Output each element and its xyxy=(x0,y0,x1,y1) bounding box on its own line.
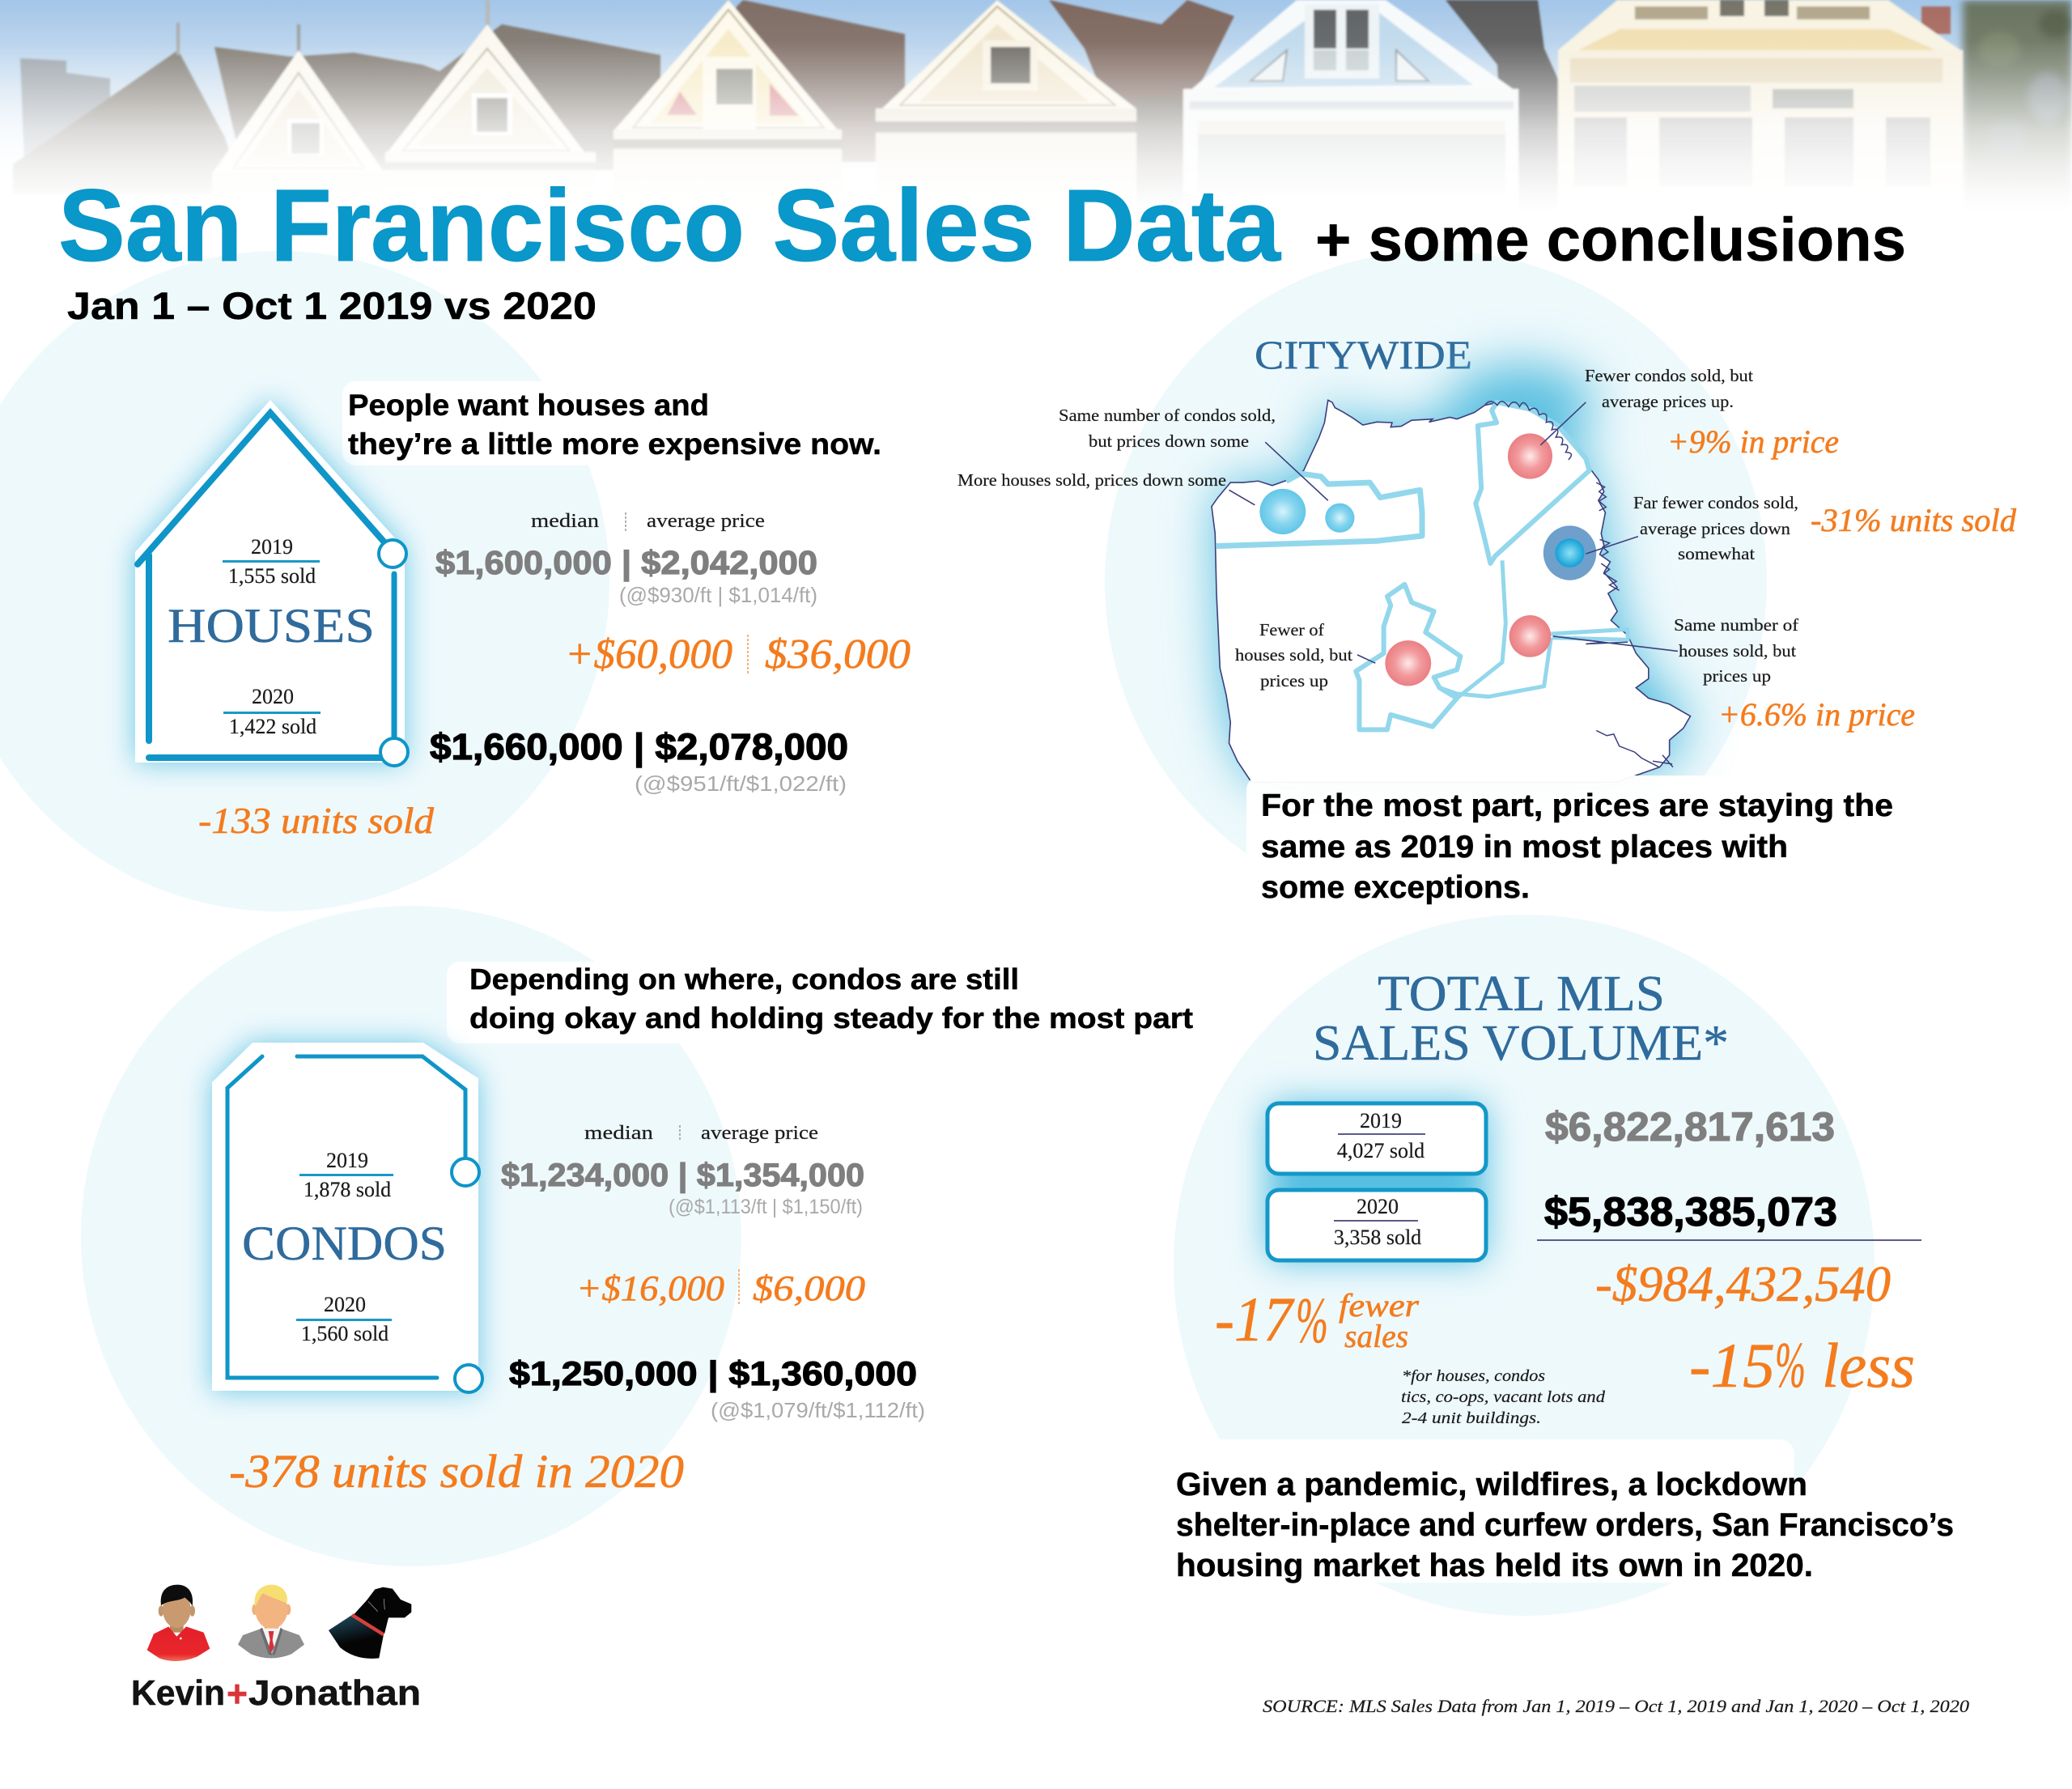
map annotation: downtown condos: Far fewer condos sold, xyxy=(1633,493,1798,512)
houses callout text xyxy=(342,381,909,465)
footnote xyxy=(1401,1367,1606,1427)
icon: house card: 2020 xyxy=(252,685,294,708)
map annotation: houses northwest: More houses sold, prices down some xyxy=(957,470,1226,490)
map annotation: downtown condos xyxy=(1633,493,1798,563)
neighborhood outline: northeast xyxy=(1475,402,1590,563)
house prices 2019: $1,600,000 | $2,042,000 xyxy=(435,544,817,581)
map annotation: southeast houses xyxy=(1674,615,1798,686)
footnote: tics, co-ops, vacant lots and xyxy=(1401,1388,1606,1406)
panel: total MLS sales volume xyxy=(1157,967,1967,1583)
volume 2019: $6,822,817,613 xyxy=(1545,1104,1835,1149)
citywide conclusion text: some exceptions. xyxy=(1261,870,1530,905)
stat: +9% in price: +9% in price xyxy=(1667,423,1839,460)
neighborhood outline: southwest centre xyxy=(1356,584,1460,729)
map annotation: central houses: prices up xyxy=(1260,671,1328,691)
stat: +6.6% in price: +6.6% in price xyxy=(1718,696,1915,733)
icon: Kevin avatar xyxy=(147,1585,210,1661)
total MLS heading xyxy=(1313,967,1729,1071)
map annotation: northeast: average prices up. xyxy=(1602,392,1734,411)
card: 2020 units xyxy=(1267,1190,1486,1260)
map annotation: downtown condos: somewhat xyxy=(1678,544,1755,563)
house price change: +$60,000 xyxy=(565,631,732,678)
subtitle: some conclusions: + some conclusions xyxy=(1315,206,1906,274)
condo price column labels: median xyxy=(584,1123,653,1144)
icon: house card: 1,555 sold xyxy=(228,564,316,588)
map annotation: northeast xyxy=(1585,366,1753,411)
condos callout text: Depending on where, condos are still xyxy=(469,962,1019,996)
overall conclusion text: shelter-in-place and curfew orders, San Francisco’s xyxy=(1176,1507,1954,1543)
logo wordmark: Jonathan xyxy=(248,1673,421,1713)
background circle: total MLS xyxy=(1174,915,1875,1616)
icon: house card: 1,422 sold xyxy=(229,715,316,738)
stat: -17% fewer sales xyxy=(1215,1284,1419,1357)
stat: -15% less: -15 xyxy=(1689,1330,1775,1400)
icon: condo card: 2020 xyxy=(324,1293,366,1316)
background circle: houses xyxy=(0,251,609,911)
house prices 2020: $1,660,000 | $2,078,000 xyxy=(430,726,848,768)
icon: house card: 2019 xyxy=(251,535,293,559)
card: 2019 units: 4,027 sold xyxy=(1337,1139,1424,1162)
citywide conclusion text: same as 2019 in most places with xyxy=(1261,830,1788,865)
map annotation: southeast houses: houses sold, but xyxy=(1679,641,1796,661)
condo price column labels xyxy=(584,1123,818,1144)
icon: dog avatar xyxy=(329,1587,411,1659)
house units sold change: -133 units sold xyxy=(198,800,435,841)
stat: -15% less: less xyxy=(1822,1330,1915,1400)
house price per foot 2020: (@$951/ft/$1,022/ft) xyxy=(635,771,847,796)
houses callout text: People want houses and xyxy=(348,389,709,422)
map annotation: central houses: Fewer of xyxy=(1259,620,1324,640)
map annotation: condos northwest xyxy=(1059,406,1276,451)
stat: -17% fewer sales: sales xyxy=(1344,1318,1408,1354)
map annotation: central houses: houses sold, but xyxy=(1235,645,1352,665)
card: 2020 units: 2020 xyxy=(1357,1195,1399,1218)
map annotation: central houses xyxy=(1235,620,1352,691)
title: San Francisco Sales Data xyxy=(58,168,1281,283)
map annotation: northeast: Fewer condos sold, but xyxy=(1585,366,1753,385)
citywide conclusion text: For the most part, prices are staying the xyxy=(1261,788,1893,823)
map annotation: condos northwest: but prices down some xyxy=(1089,431,1249,451)
volume difference: -$984,432,540 xyxy=(1595,1257,1891,1312)
citywide heading: CITYWIDE xyxy=(1255,332,1472,377)
condos callout text xyxy=(447,962,1216,1043)
coastline detail xyxy=(1484,402,1628,644)
map annotation: southeast houses: prices up xyxy=(1703,666,1771,686)
condo price change: $6,000 xyxy=(753,1268,865,1308)
date range: Jan 1 – Oct 1 2019 vs 2020 xyxy=(67,284,597,327)
gables xyxy=(212,50,385,174)
condos callout text: doing okay and holding steady for the most part xyxy=(469,1001,1193,1035)
icon: condo card xyxy=(212,1043,482,1392)
total MLS heading: TOTAL MLS xyxy=(1378,967,1665,1022)
house price column labels: median xyxy=(531,511,599,532)
logo wordmark xyxy=(131,1672,421,1715)
condo prices 2020: $1,250,000 | $1,360,000 xyxy=(509,1354,917,1393)
icon: condo card: 1,560 sold xyxy=(301,1322,388,1345)
map annotation: downtown condos: average prices down xyxy=(1640,519,1791,538)
condo price change xyxy=(576,1268,865,1308)
source note: SOURCE: MLS Sales Data from Jan 1, 2019 – Oct 1, 2019 and Jan 1, 2020 – Oct 1, 2020 xyxy=(1263,1696,1969,1716)
overall conclusion text: housing market has held its own in 2020. xyxy=(1176,1548,1813,1583)
icon: condo card: 1,878 sold xyxy=(304,1178,391,1201)
icon: house card: HOUSES xyxy=(168,599,375,652)
map annotation: southeast houses: Same number of xyxy=(1674,615,1798,635)
icon: Jonathan avatar xyxy=(238,1585,304,1658)
card: 2019 units xyxy=(1267,1103,1486,1260)
footnote: 2-4 unit buildings. xyxy=(1402,1409,1541,1427)
stat: -15% less: % xyxy=(1775,1330,1806,1401)
icon: condo card: 2019 xyxy=(326,1149,368,1172)
header photo: painted ladies houses fading to white xyxy=(0,0,2072,243)
houses callout text: they’re a little more expensive now. xyxy=(348,427,881,461)
condo price column labels: average price xyxy=(701,1123,818,1144)
stat: -15% less xyxy=(1689,1330,1915,1401)
map annotation: condos northwest: Same number of condos sold, xyxy=(1059,406,1276,425)
logo: Kevin + Jonathan xyxy=(131,1585,421,1715)
house price change: $36,000 xyxy=(765,631,911,678)
neighborhood outline: Richmond xyxy=(1216,474,1422,546)
condo price per foot 2019: (@$1,113/ft | $1,150/ft) xyxy=(669,1196,863,1218)
condo price per foot 2020: (@$1,079/ft/$1,112/ft) xyxy=(711,1398,925,1422)
house price column labels: average price xyxy=(647,511,765,532)
map of San Francisco xyxy=(1212,400,1690,782)
logo wordmark: + xyxy=(227,1672,248,1715)
card: 2020 units: 3,358 sold xyxy=(1334,1226,1421,1249)
background circle: citywide xyxy=(1105,251,1767,913)
card: 2019 units: 2019 xyxy=(1360,1109,1402,1132)
stat: -17% fewer sales: fewer xyxy=(1339,1287,1419,1324)
facades xyxy=(212,172,385,229)
panel: citywide map xyxy=(957,332,2017,915)
overall conclusion text: Given a pandemic, wildfires, a lockdown xyxy=(1176,1467,1807,1502)
house price column labels xyxy=(531,511,765,532)
panel: condos xyxy=(212,962,1216,1498)
panel: houses xyxy=(135,381,911,841)
stat: -17% fewer sales: % xyxy=(1296,1285,1328,1357)
icon: condo card: CONDOS xyxy=(242,1217,447,1270)
stat: -17% fewer sales: -17 xyxy=(1215,1284,1295,1354)
condo prices 2019: $1,234,000 | $1,354,000 xyxy=(501,1158,864,1193)
volume 2020: $5,838,385,073 xyxy=(1544,1189,1837,1234)
logo wordmark: Kevin xyxy=(131,1673,225,1713)
map glow xyxy=(1215,364,1687,782)
tree xyxy=(1963,0,2072,219)
icon: house card xyxy=(135,400,408,766)
leader lines xyxy=(1229,402,1678,663)
house price per foot 2019: (@$930/ft | $1,014/ft) xyxy=(619,583,817,607)
bubble markers xyxy=(1259,433,1596,686)
overall conclusion text xyxy=(1157,1439,1967,1583)
condo units sold change: -378 units sold in 2020 xyxy=(229,1445,684,1498)
condo price change: +$16,000 xyxy=(576,1268,724,1308)
footnote: *for houses, condos xyxy=(1402,1367,1545,1385)
citywide conclusion text xyxy=(1246,776,1918,915)
total MLS heading: SALES VOLUME* xyxy=(1313,1016,1729,1071)
stat: -31% units sold: -31% units sold xyxy=(1811,502,2017,538)
house price change xyxy=(565,631,911,678)
neighborhood outline: mission and southeast xyxy=(1433,560,1628,727)
background circle: condos xyxy=(81,906,741,1566)
